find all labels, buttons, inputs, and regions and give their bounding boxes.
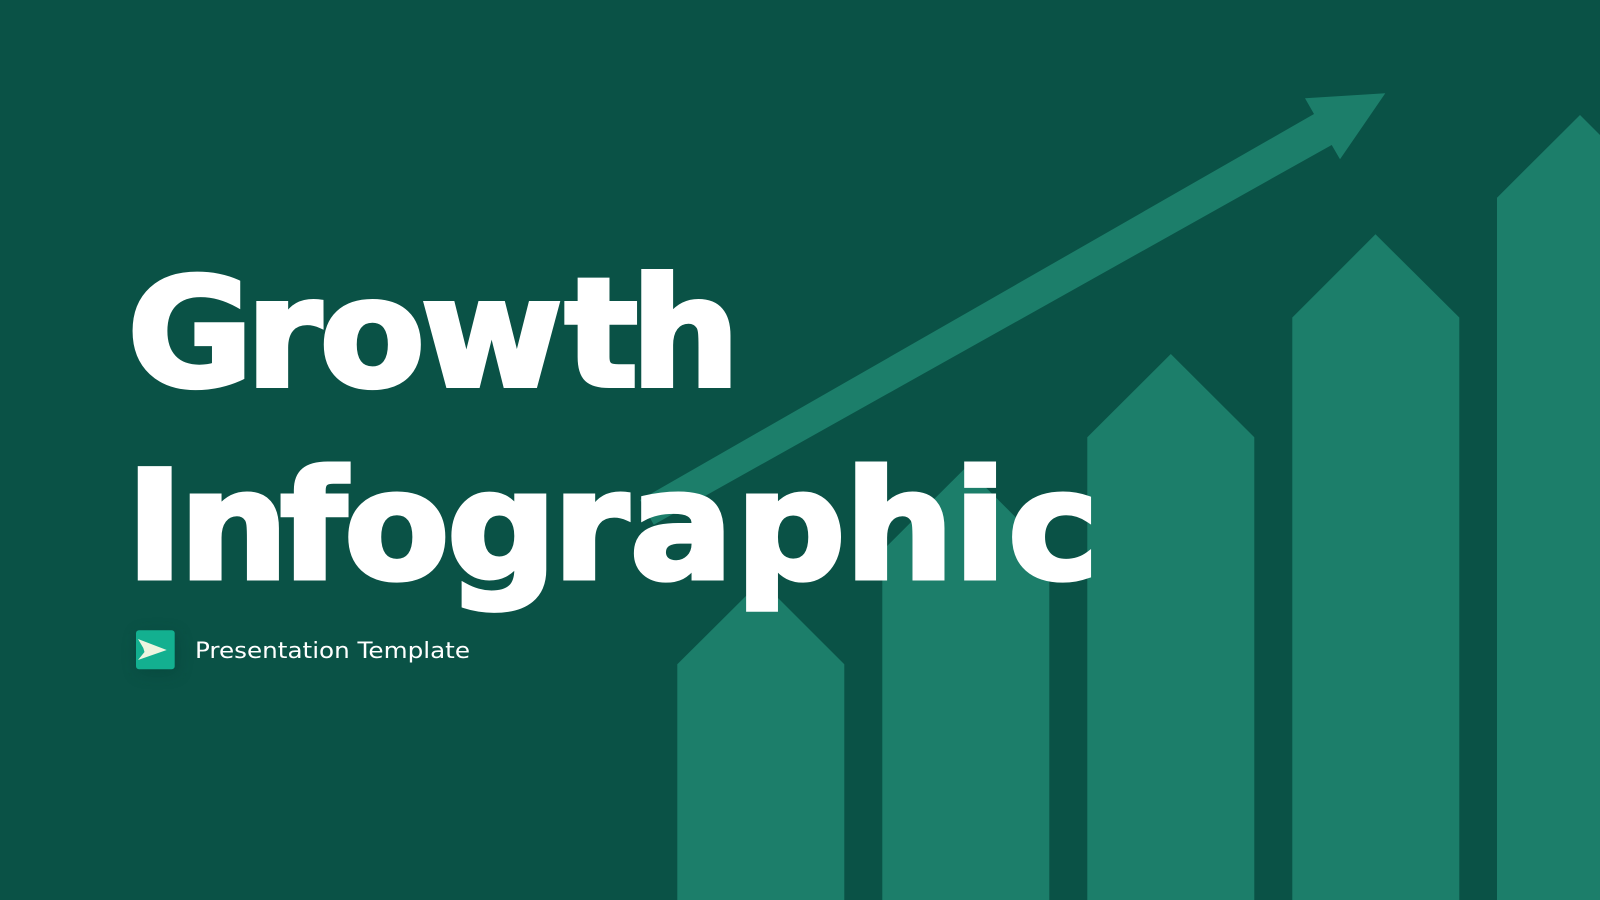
bar 3 — [1087, 354, 1254, 900]
bar 5 — [1497, 115, 1600, 900]
arrow: upward trend — [640, 93, 1385, 525]
bar 2 — [882, 468, 1049, 900]
brand icon — [136, 630, 177, 673]
title — [126, 246, 1099, 614]
title line 1: Growth — [127, 246, 740, 421]
title line 2: Infographic — [126, 438, 1099, 614]
chart: rising bars — [677, 115, 1600, 900]
bar 4 — [1292, 234, 1459, 900]
subtitle: Presentation Template — [195, 638, 470, 664]
bar 1 — [677, 581, 844, 900]
